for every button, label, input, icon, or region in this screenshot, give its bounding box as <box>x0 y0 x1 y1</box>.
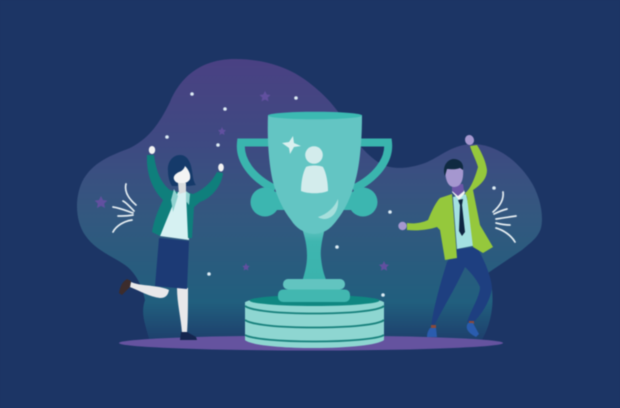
sparkle icon <box>282 136 301 154</box>
trophy <box>241 112 388 282</box>
woman shoe front <box>180 332 197 340</box>
woman figure <box>119 146 224 340</box>
woman face <box>174 166 190 183</box>
bowl highlight <box>318 199 338 219</box>
man figure <box>398 134 493 337</box>
woman hands <box>149 146 224 172</box>
man hair <box>444 159 463 176</box>
motion lines left <box>113 184 136 232</box>
man tie <box>458 199 465 236</box>
stars and dots <box>95 91 496 297</box>
person icon <box>301 146 328 193</box>
man jacket <box>407 145 493 260</box>
background blob <box>77 59 542 343</box>
trophy bowl <box>268 115 362 234</box>
woman jacket and arms <box>147 155 223 238</box>
disc podium <box>245 295 384 348</box>
purple stars <box>95 91 389 271</box>
woman shoe back <box>119 279 131 295</box>
man collar <box>452 190 465 200</box>
trophy rim <box>268 112 362 119</box>
trophy handles <box>241 142 388 189</box>
ground ellipse <box>119 336 503 350</box>
man legs <box>431 247 492 328</box>
man neck <box>452 184 464 196</box>
man shirt <box>453 194 477 249</box>
white dots <box>165 92 496 297</box>
trophy stem <box>302 228 327 282</box>
trophy base steps <box>278 279 350 302</box>
motion lines right <box>493 192 516 242</box>
woman standing leg <box>177 288 188 333</box>
trophy side knobs <box>250 188 378 216</box>
man socks <box>431 321 474 328</box>
woman collar <box>171 189 190 212</box>
woman shirt <box>160 192 189 240</box>
woman skirt <box>155 238 189 289</box>
woman hair <box>168 155 196 186</box>
man head <box>445 168 463 187</box>
man hands <box>398 134 475 230</box>
woman raised leg <box>130 282 169 298</box>
man shoes <box>427 323 479 337</box>
